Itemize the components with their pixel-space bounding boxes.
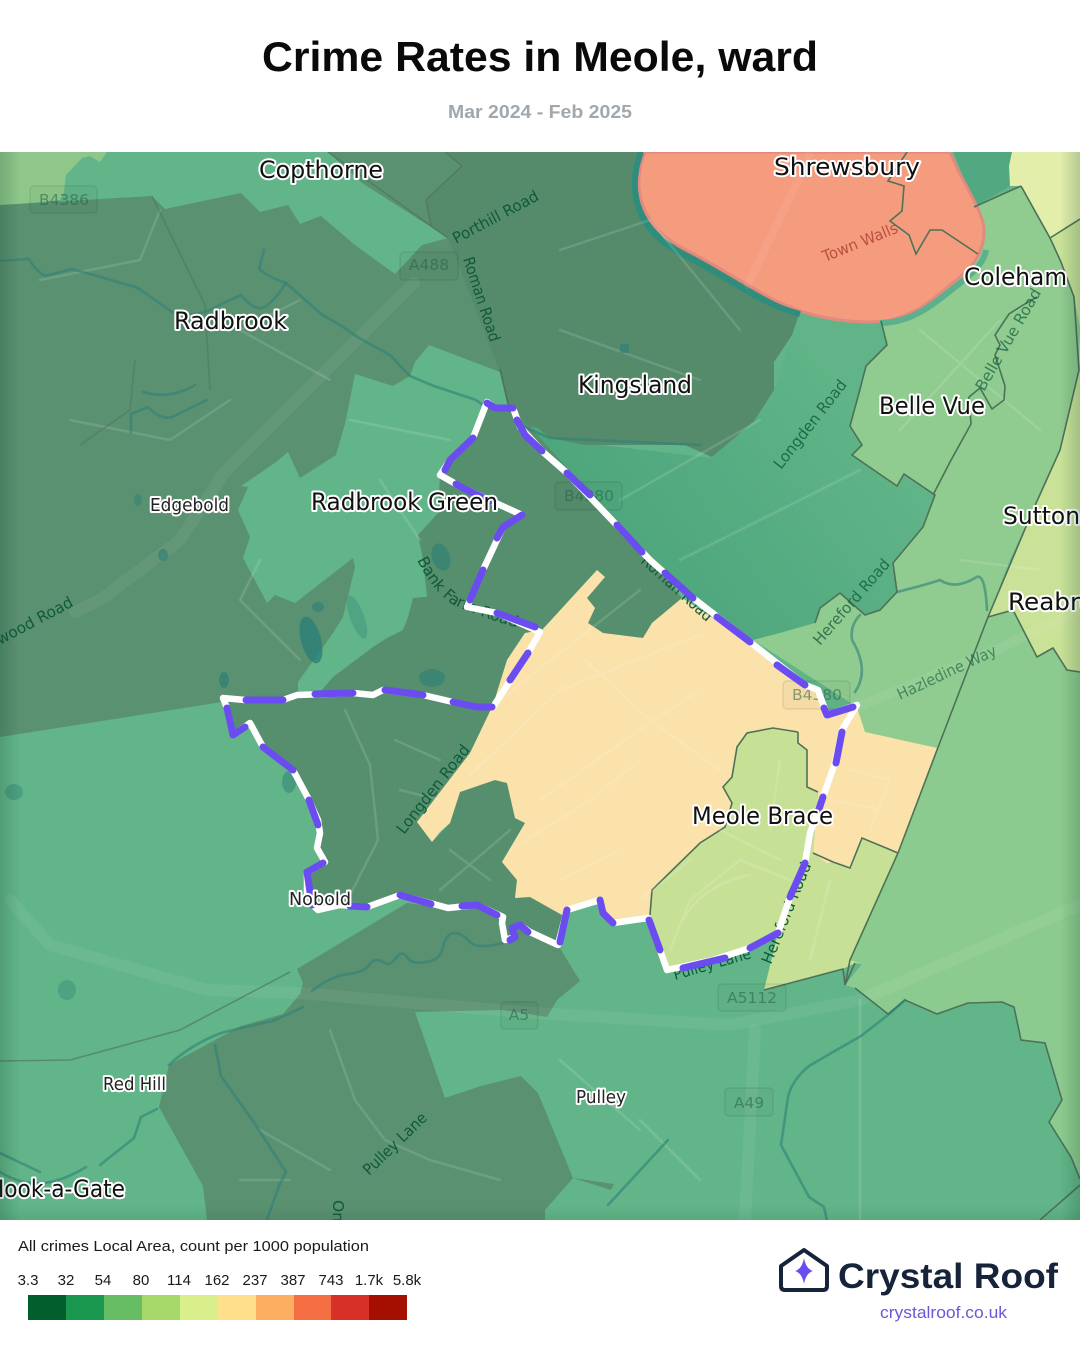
place labels: Copthorne [259,156,383,184]
legend scale labels: 114 [167,1272,191,1289]
website link: crystalroof.co.uk [880,1304,1008,1322]
road shields: B4380 [792,686,842,704]
road shields [30,186,850,1116]
legend colour bar [28,1295,407,1320]
legend scale labels: 1.7k [355,1272,384,1289]
title: Crime Rates in Meole, ward [262,33,818,80]
road labels: Roman Road [637,552,716,625]
icon: Crystal Roof house logo [781,1250,827,1290]
road labels: Hereford Road [758,860,815,966]
legend scale labels [18,1272,422,1289]
place labels [0,153,1080,1203]
place labels: Belle Vue [879,392,985,420]
legend scale labels: 387 [280,1272,306,1289]
road labels: Hazledine Way [894,642,1000,704]
road labels: Hereford Road [809,555,894,649]
rivers and ponds [0,250,987,1225]
region: Meole Brace yellow [417,570,937,923]
logo wordmark: Crystal Roof [838,1257,1058,1296]
legend scale labels: 743 [318,1272,344,1289]
place labels: Pulley [576,1087,626,1108]
road labels: On [329,1200,347,1222]
road labels: Bank Farm Road [418,556,519,628]
road labels: Pulley Lane [359,1109,431,1179]
road labels: Porthill Road [449,187,542,248]
legend scale labels: 5.8k [393,1272,422,1289]
region: Belle Vue light green [753,186,1080,750]
road labels: Town Walls [819,219,901,266]
ward boundary: white line with purple dashes [223,402,857,970]
subtitle: date range: Mar 2024 - Feb 2025 [448,102,632,122]
region: south east light green [845,610,1080,1179]
road shields: A5112 [727,989,777,1007]
region: southern dark band along brook [297,903,580,1017]
region: top right pale yellow [1009,152,1080,238]
region: top-left pale corner [0,152,115,206]
legend scale labels: 237 [242,1272,268,1289]
place labels: Meole Brace [692,802,833,830]
place labels: Radbrook Green [311,488,498,516]
road labels: Pulley Lane [671,944,753,984]
legend scale labels: 3.3 [18,1272,38,1289]
road labels: Roman Road [459,255,504,344]
region: orange high-crime Shrewsbury centre [639,152,984,322]
place labels: Kingsland [578,371,692,399]
place labels: Nobold [289,889,351,910]
region: central mid green band around Longden Road [530,425,884,640]
place labels: Coleham [964,263,1067,291]
road labels: Longden Road [393,741,474,837]
place labels: Red Hill [103,1074,166,1095]
place labels: Sutton [1003,502,1080,530]
legend title: All crimes Local Area, count per 1000 population [18,1238,369,1255]
legend scale labels: 54 [95,1272,111,1289]
road labels [0,190,1041,1220]
region: Pulley dark green [159,994,614,1220]
roads network [10,155,1080,1220]
region: Sutton yellow green [988,219,1080,672]
road shields: B4380 [564,487,614,505]
region: pale green lower Meole Brace [650,728,898,990]
place labels: Edgebold [150,495,229,516]
region: ward west dark green [223,403,682,945]
road labels: Longden Road [770,376,851,472]
legend scale labels: 32 [58,1272,74,1289]
legend scale labels: 162 [204,1272,230,1289]
road shields: A488 [409,256,449,274]
road shields: B4386 [39,191,89,209]
boundary lines [0,152,1080,1220]
place labels: Shrewsbury [774,153,920,181]
road labels: Belle Vue Road [972,285,1045,394]
region: Kingsland and Radbrook dark green [0,152,799,737]
choropleth map panel [0,152,1080,1220]
road shields: A5 [509,1006,529,1024]
region: top right strip by river [954,152,1012,207]
place labels: Radbrook [174,307,287,335]
legend scale labels: 80 [133,1272,149,1289]
road shields: A49 [734,1094,764,1112]
